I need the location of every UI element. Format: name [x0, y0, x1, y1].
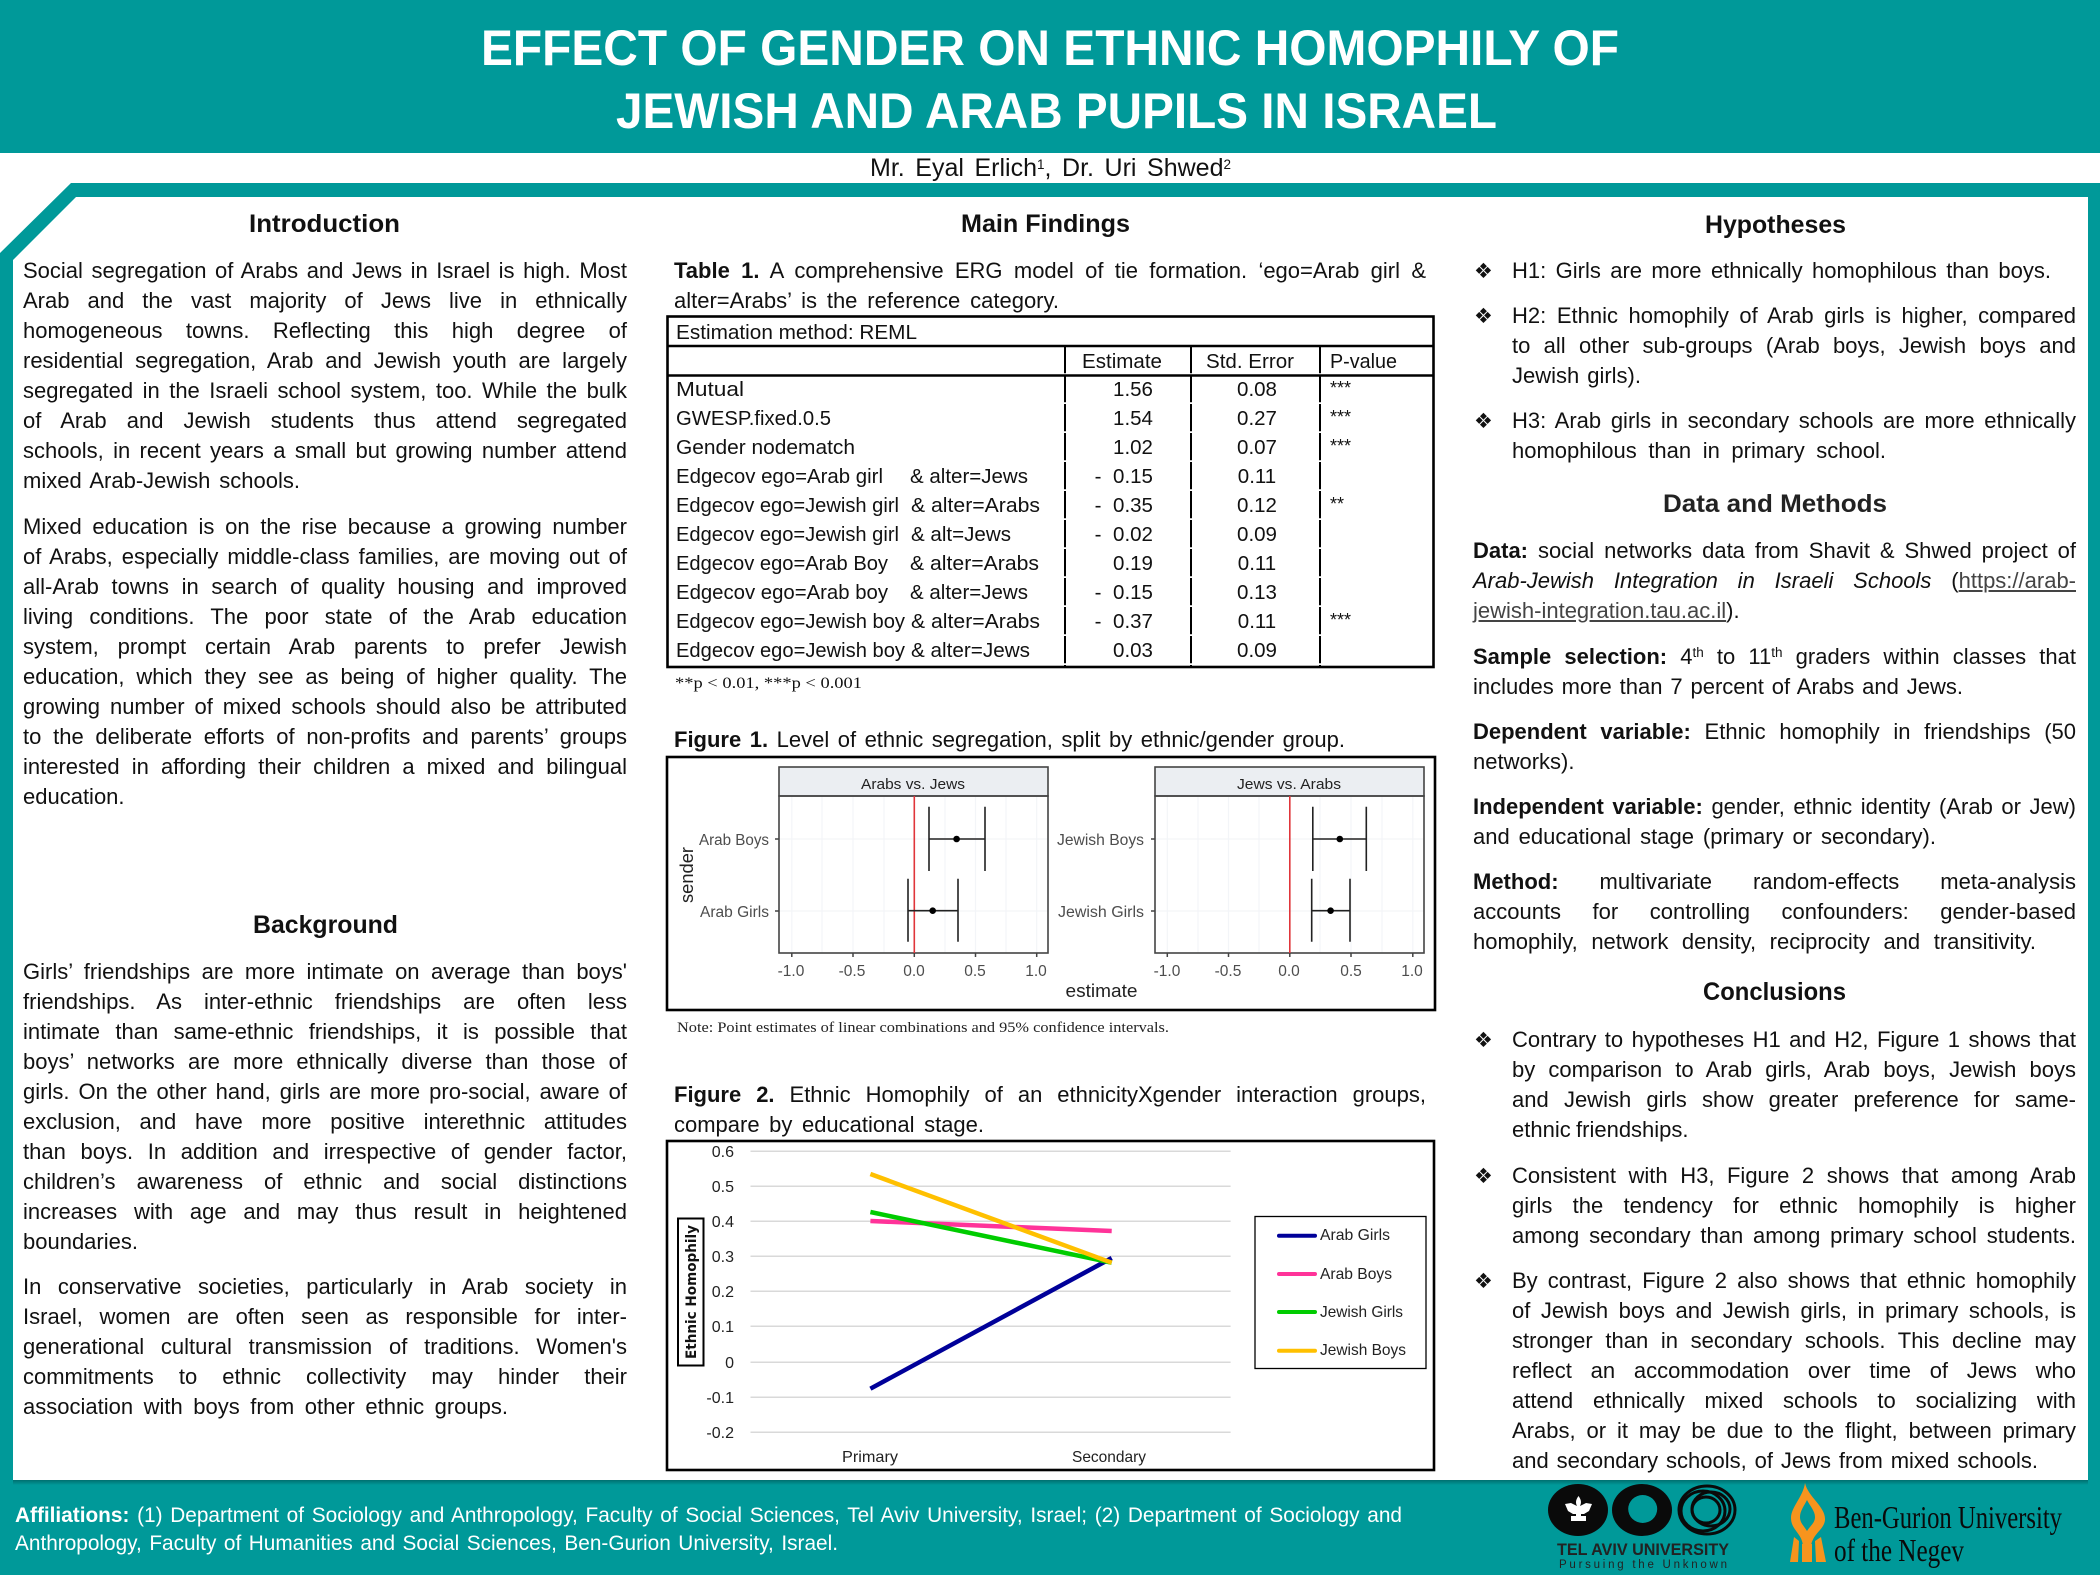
- text: ❖: [1474, 304, 1493, 328]
- text: dependent variable: Dependent variable: Ethnic homophily in friendships (50: [1473, 718, 2076, 744]
- table 1: ERG model: 0.11: [1238, 610, 1276, 633]
- table 1: ERG model: -: [1095, 581, 1101, 604]
- hypothesis H2: [1474, 302, 2076, 388]
- panel: jews vs arabs: 1.0: [1401, 963, 1423, 980]
- x axis labels: Primary: [842, 1449, 898, 1466]
- text: background paragraph 1: than boys. In addition and irrespective of gender factor,: [23, 1138, 627, 1164]
- panel: arabs vs jews: -0.5: [839, 963, 865, 980]
- text: background paragraph 1: [23, 958, 628, 1254]
- table 1: ERG model: Edgecov ego=Jewish girl: [676, 494, 899, 517]
- text: background paragraph 1: Girls’ friendships are more intimate on average than boys': [23, 958, 627, 984]
- conclusion 3: attend ethnically mixed schools to socializing with: [1512, 1388, 2076, 1412]
- text: introduction paragraph 2: all-Arab towns in search of quality housing and improved: [23, 574, 627, 598]
- text: independent variable: and educational stage (primary or secondary).: [1473, 824, 1936, 848]
- table 1: ERG model: & alt=Jews: [911, 523, 1011, 546]
- table 1: ERG model: 0.03: [1113, 639, 1153, 662]
- frame shadow: [13, 1480, 2088, 1485]
- table 1: ERG model: 0.13: [1237, 581, 1277, 604]
- x axis labels: Secondary: [1072, 1449, 1146, 1466]
- text: introduction paragraph 1: mixed Arab-Jewish schools.: [23, 468, 300, 492]
- table 1: ERG model: & alter=Jews: [910, 581, 1028, 604]
- conclusion 3: stronger than in secondary schools. This decline may: [1512, 1328, 2076, 1352]
- heading: data and methods: Data and Methods: [1663, 490, 1887, 518]
- panel: jews vs arabs: Jews vs. Arabs: [1237, 776, 1341, 793]
- table 1: ERG model: [667, 316, 1434, 667]
- series lines: [870, 1174, 1112, 1389]
- text: independent variable: [1473, 794, 2076, 848]
- text: introduction paragraph 2: living conditions. The poor state of the Arab education: [23, 604, 627, 628]
- table 1: ERG model: 0.07: [1237, 436, 1277, 459]
- text: background paragraph 1: girls. On the other hand, girls are more pro-social, aware of: [23, 1078, 627, 1104]
- panel: jews vs arabs: [1057, 767, 1424, 980]
- hypothesis H3: homophilous than in primary school.: [1512, 438, 1886, 462]
- text: background paragraph 1: friendships. As inter-ethnic friendships are often less: [23, 988, 627, 1014]
- legend: Arab Girls: [1320, 1227, 1390, 1244]
- table 1: ERG model: Gender nodematch: [676, 436, 855, 459]
- hypothesis H2: to all other sub-groups (Arab boys, Jewish boys and: [1512, 332, 2076, 358]
- heading: main findings: Main Findings: [961, 210, 1130, 238]
- text: data: Arab-Jewish Integration in Israeli Schools (https://arab-: [1473, 568, 2076, 592]
- text: dependent variable: networks).: [1473, 748, 1574, 774]
- legend: Jewish Boys: [1320, 1342, 1406, 1359]
- text: introduction paragraph 1: segregated in the Israeli school system, too. While the bulk: [23, 378, 627, 402]
- text: background paragraph 1: intimate than same-ethnic friendships, it is possible that: [23, 1018, 627, 1044]
- heading: hypotheses: Hypotheses: [1705, 211, 1846, 239]
- table 1: ERG model: Edgecov ego=Jewish boy: [676, 610, 906, 633]
- text: introduction paragraph 2: Mixed education is on the rise because a growing number: [23, 514, 627, 538]
- text: background paragraph 1: boys’ networks are more ethnically diverse than those of: [23, 1048, 627, 1074]
- text: background paragraph 1: exclusion, and have more positive interethnic attitudes: [23, 1108, 627, 1134]
- conclusion 2: [1474, 1162, 2076, 1248]
- table 1: ERG model: ***: [1330, 436, 1351, 456]
- logo: ben-gurion university: of the Negev: [1834, 1532, 1964, 1568]
- legend: Jewish Girls: [1320, 1304, 1403, 1321]
- legend: Arab Boys: [1320, 1266, 1392, 1283]
- panel: arabs vs jews: 0.5: [964, 963, 986, 980]
- text: data: [1472, 538, 2076, 622]
- y axis title: Ethnic Homophily: [684, 1224, 700, 1359]
- text: introduction paragraph 1: residential segregation, Arab and Jewish youth are largely: [23, 348, 627, 372]
- table 1: ERG model: Edgecov ego=Jewish boy: [676, 639, 906, 662]
- table 1: ERG model: **: [1330, 494, 1344, 514]
- gridlines and y axis: 0.5: [712, 1179, 734, 1196]
- panel: jews vs arabs: 0.5: [1340, 963, 1362, 980]
- text: introduction paragraph 2: [23, 514, 628, 808]
- caption: figure 2: [674, 1082, 1426, 1136]
- table 1: ERG model: -: [1095, 523, 1101, 546]
- text: introduction paragraph 2: of Arabs, especially middle-class families, are moving out of: [23, 544, 627, 568]
- conclusion 1: Contrary to hypotheses H1 and H2, Figure 1 shows that: [1512, 1026, 2076, 1052]
- list: conclusions: [1474, 1026, 2076, 1472]
- table 1: ERG model: Edgecov ego=Arab boy: [676, 581, 889, 604]
- text: ❖: [1474, 408, 1493, 432]
- text: ❖: [1474, 258, 1493, 282]
- text: data: Data: social networks data from Shavit & Shwed project of: [1473, 538, 2076, 562]
- table 1: ERG model: Estimate: [1082, 350, 1162, 373]
- conclusion 3: [1474, 1268, 2076, 1472]
- text: sample selection: [1473, 644, 2076, 698]
- hypothesis H2: Jewish girls).: [1512, 362, 1641, 388]
- list: hypotheses: [1474, 258, 2076, 462]
- table 1: ERG model: 0.02: [1113, 523, 1153, 546]
- panel: jews vs arabs: Jewish Boys: [1057, 832, 1144, 849]
- y axis title: [678, 1218, 704, 1366]
- text: background paragraph 2: association with boys from other ethnic groups.: [23, 1394, 508, 1418]
- logo: ben-gurion university: [1790, 1483, 2062, 1568]
- authors: Mr. Eyal Erlich1, Dr. Uri Shwed2: [870, 154, 1231, 182]
- footer: affiliations: [15, 1504, 1402, 1554]
- footer: affiliations: Affiliations: (1) Department of Sociology and Anthropology, Faculty of Social Sciences, Tel Aviv University, Israel; (2) Department of Sociology and: [15, 1504, 1402, 1526]
- table 1: ERG model: -: [1095, 610, 1101, 633]
- text: sample selection: Sample selection: 4th to 11th graders within classes that: [1473, 644, 2076, 668]
- table 1: ERG model: ***: [1330, 378, 1351, 398]
- logo: tel aviv university: TEL AVIV UNIVERSITY: [1557, 1540, 1730, 1559]
- table 1: ERG model: 1.56: [1113, 378, 1153, 401]
- text: background paragraph 2: Israel, women are often seen as responsible for inter-: [23, 1304, 627, 1328]
- legend: [1255, 1216, 1426, 1368]
- heading: introduction: Introduction: [249, 210, 400, 238]
- text: introduction paragraph 1: schools, in recent years a small but growing number attend: [23, 438, 627, 462]
- text: introduction paragraph 1: Social segregation of Arabs and Jews in Israel is high. Most: [23, 258, 627, 282]
- figure 1 note: Note: Point estimates of linear combinations and 95% confidence intervals.: [677, 1020, 1169, 1036]
- panel: jews vs arabs: -1.0: [1154, 963, 1181, 980]
- table 1: ERG model: Mutual: [676, 378, 744, 401]
- table 1: ERG model: Edgecov ego=Arab Boy: [676, 552, 889, 575]
- gridlines and y axis: -0.2: [706, 1425, 734, 1442]
- text: ❖: [1474, 1268, 1493, 1292]
- text: data: jewish-integration.tau.ac.il).: [1473, 598, 1740, 622]
- text: method: Method: multivariate random-effects meta-analysis: [1473, 868, 2076, 894]
- text: background paragraph 2: generational cultural transmission of traditions. Women's: [23, 1334, 627, 1358]
- text: background paragraph 1: boundaries.: [23, 1228, 138, 1254]
- table 1: ERG model: & alter=Jews: [910, 465, 1028, 488]
- conclusion 1: by comparison to Arab girls, Arab boys, Jewish boys: [1512, 1056, 2076, 1082]
- axis title: estimate: estimate: [1066, 980, 1138, 1001]
- table 1: ERG model: -: [1095, 465, 1101, 488]
- text: ❖: [1474, 1028, 1493, 1052]
- text: background paragraph 2: [23, 1274, 627, 1418]
- heading: conclusions: Conclusions: [1703, 978, 1846, 1006]
- table 1: ERG model: 1.02: [1113, 436, 1153, 459]
- conclusion 2: girls the tendency for ethnic homophily is higher: [1512, 1192, 2076, 1218]
- gridlines and y axis: 0.6: [712, 1144, 734, 1161]
- panel: jews vs arabs: 0.0: [1278, 963, 1300, 980]
- text: ❖: [1474, 1164, 1493, 1188]
- hypothesis H3: [1474, 408, 2076, 462]
- caption: figure 2: compare by educational stage.: [674, 1112, 984, 1136]
- text: independent variable: Independent variable: gender, ethnic identity (Arab or Jew): [1473, 794, 2076, 818]
- panel: arabs vs jews: Arab Girls: [700, 904, 769, 921]
- hypothesis H3: H3: Arab girls in secondary schools are more ethnically: [1512, 408, 2076, 432]
- panel: jews vs arabs: -0.5: [1215, 963, 1241, 980]
- figure 2: line chart: [667, 1141, 1434, 1470]
- panel: arabs vs jews: 0.0: [903, 963, 925, 980]
- header banner: [0, 0, 2100, 153]
- gridlines and y axis: 0: [725, 1355, 734, 1372]
- table 1: ERG model: & alter=Arabs: [911, 494, 1040, 517]
- text: background paragraph 2: commitments to ethnic collectivity may hinder their: [23, 1364, 627, 1388]
- text: introduction paragraph 2: system, prompt certain Arab parents to prefer Jewish: [23, 634, 627, 658]
- table 1: ERG model: GWESP.fixed.0.5: [676, 407, 831, 430]
- table 1: ERG model: Std. Error: [1206, 350, 1294, 373]
- title: EFFECT OF GENDER ON ETHNIC HOMOPHILY OF: [481, 20, 1619, 76]
- conclusion 2: among secondary than among primary school students.: [1512, 1222, 2076, 1248]
- text: introduction paragraph 2: growing number of mixed schools should also be attributed: [23, 694, 627, 718]
- caption: figure 1: Figure 1. Level of ethnic segregation, split by ethnic/gender group.: [674, 726, 1345, 752]
- conclusion 3: By contrast, Figure 2 also shows that ethnic homophily: [1512, 1268, 2076, 1292]
- table 1: ERG model: & alter=Arabs: [911, 610, 1040, 633]
- table 1: ERG model: & alter=Jews: [911, 639, 1030, 662]
- table 1: ERG model: Edgecov ego=Arab girl: [676, 465, 883, 488]
- caption: table 1: alter=Arabs’ is the reference category.: [674, 288, 1059, 312]
- table 1: ERG model: 0.11: [1238, 552, 1276, 575]
- caption: table 1: Table 1. A comprehensive ERG model of tie formation. ‘ego=Arab girl &: [674, 258, 1426, 282]
- text: introduction paragraph 2: interested in affording their children a mixed and bilingual: [23, 754, 627, 778]
- table 1: ERG model: 0.09: [1237, 523, 1277, 546]
- title: JEWISH AND ARAB PUPILS IN ISRAEL: [616, 83, 1497, 139]
- table 1: ERG model: & alter=Arabs: [910, 552, 1039, 575]
- heading: background: Background: [253, 911, 398, 939]
- text: method: [1473, 868, 2076, 954]
- table 1: ERG model: 0.37: [1113, 610, 1153, 633]
- logo: tel aviv university: Pursuing the Unknown: [1559, 1559, 1727, 1571]
- caption: table 1: [674, 258, 1426, 312]
- axis title: sender: sender: [676, 847, 697, 903]
- caption: figure 2: Figure 2. Ethnic Homophily of an ethnicityXgender interaction groups,: [674, 1082, 1426, 1106]
- gridlines and y axis: 0.3: [712, 1249, 734, 1266]
- table 1: ERG model: ***: [1330, 407, 1351, 427]
- text: dependent variable: [1473, 718, 2076, 774]
- table 1: ERG model: 0.35: [1113, 494, 1153, 517]
- gridlines and y axis: [706, 1144, 1231, 1442]
- text: introduction paragraph 2: education.: [23, 784, 125, 808]
- text: introduction paragraph 2: to the deliberate efforts of non-profits and parents’ groups: [23, 724, 627, 748]
- table 1: ERG model: -: [1095, 494, 1101, 517]
- conclusion 2: Consistent with H3, Figure 2 shows that among Arab: [1512, 1162, 2076, 1188]
- table 1: ERG model: Estimation method: REML: [676, 321, 917, 344]
- table 1: ERG model: 0.15: [1113, 581, 1153, 604]
- hypothesis H2: H2: Ethnic homophily of Arab girls is higher, compared: [1512, 302, 2076, 328]
- panel: arabs vs jews: -1.0: [778, 963, 805, 980]
- gridlines and y axis: 0.4: [712, 1214, 734, 1231]
- table 1: ERG model: 0.09: [1237, 639, 1277, 662]
- gridlines and y axis: 0.2: [712, 1284, 734, 1301]
- conclusion 3: Arabs, or it may be due to the flight, between primary: [1512, 1418, 2076, 1442]
- table 1: ERG model: 0.11: [1238, 465, 1276, 488]
- conclusion 3: and secondary schools, of Jews from mixed schools.: [1512, 1448, 2038, 1472]
- text: sample selection: includes more than 7 percent of Arabs and Jews.: [1473, 674, 1963, 698]
- table 1: ERG model: ***: [1330, 610, 1351, 630]
- gridlines and y axis: -0.1: [706, 1390, 734, 1407]
- text: method: homophily, network density, reciprocity and transitivity.: [1473, 928, 2036, 954]
- table 1: ERG model: 1.54: [1113, 407, 1153, 430]
- panel: arabs vs jews: [699, 767, 1048, 980]
- x axis labels: [842, 1449, 1146, 1466]
- table 1: ERG model: 0.12: [1237, 494, 1277, 517]
- table 1: ERG model: P-value: [1330, 350, 1397, 373]
- table 1: ERG model: 0.27: [1237, 407, 1277, 430]
- table 1: ERG model: 0.15: [1113, 465, 1153, 488]
- panel: arabs vs jews: 1.0: [1025, 963, 1047, 980]
- text: background paragraph 1: children’s awareness of ethnic and social distinctions: [23, 1168, 627, 1194]
- panel: arabs vs jews: Arabs vs. Jews: [861, 776, 965, 793]
- logo: tel aviv university: [1548, 1484, 1735, 1571]
- gridlines and y axis: 0.1: [712, 1319, 734, 1336]
- title: [481, 20, 1619, 139]
- panel: jews vs arabs: Jewish Girls: [1058, 904, 1144, 921]
- text: background paragraph 1: increases with age and may thus result in heightened: [23, 1198, 627, 1224]
- table 1: ERG model: 0.19: [1113, 552, 1153, 575]
- table 1: ERG model: Edgecov ego=Jewish girl: [676, 523, 899, 546]
- text: introduction paragraph 1: homogeneous towns. Reflecting this high degree of: [23, 318, 627, 342]
- text: method: accounts for controlling confounders: gender-based: [1473, 898, 2076, 924]
- table 1: ERG model: 0.08: [1237, 378, 1277, 401]
- conclusion 3: of Jewish boys and Jewish girls, in primary schools, is: [1512, 1298, 2076, 1322]
- conclusion 1: and Jewish girls show greater preference for same-: [1512, 1086, 2076, 1112]
- text: introduction paragraph 1: of Arab and Jewish students thus attend segregated: [23, 408, 627, 432]
- table footnote: **p < 0.01, ***p < 0.001: [675, 675, 862, 692]
- hypothesis H1: H1: Girls are more ethnically homophilous than boys.: [1512, 258, 2051, 282]
- text: introduction paragraph 2: education, which they see as being of higher quality. The: [23, 664, 627, 688]
- text: background paragraph 2: In conservative societies, particularly in Arab society in: [23, 1274, 627, 1298]
- text: introduction paragraph 1: Arab and the vast majority of Jews live in ethnically: [23, 288, 627, 312]
- conclusion 1: [1474, 1026, 2076, 1142]
- panel: arabs vs jews: Arab Boys: [699, 832, 769, 849]
- figure 1: forest plots: [667, 757, 1435, 1010]
- conclusion 3: reflect an accommodation over time of Jews who: [1512, 1358, 2076, 1382]
- conclusion 1: ethnic friendships.: [1512, 1116, 1689, 1142]
- text: introduction paragraph 1: [23, 258, 628, 492]
- footer: affiliations: Anthropology, Faculty of Humanities and Social Sciences, Ben-Gurion University, Israel.: [15, 1532, 838, 1554]
